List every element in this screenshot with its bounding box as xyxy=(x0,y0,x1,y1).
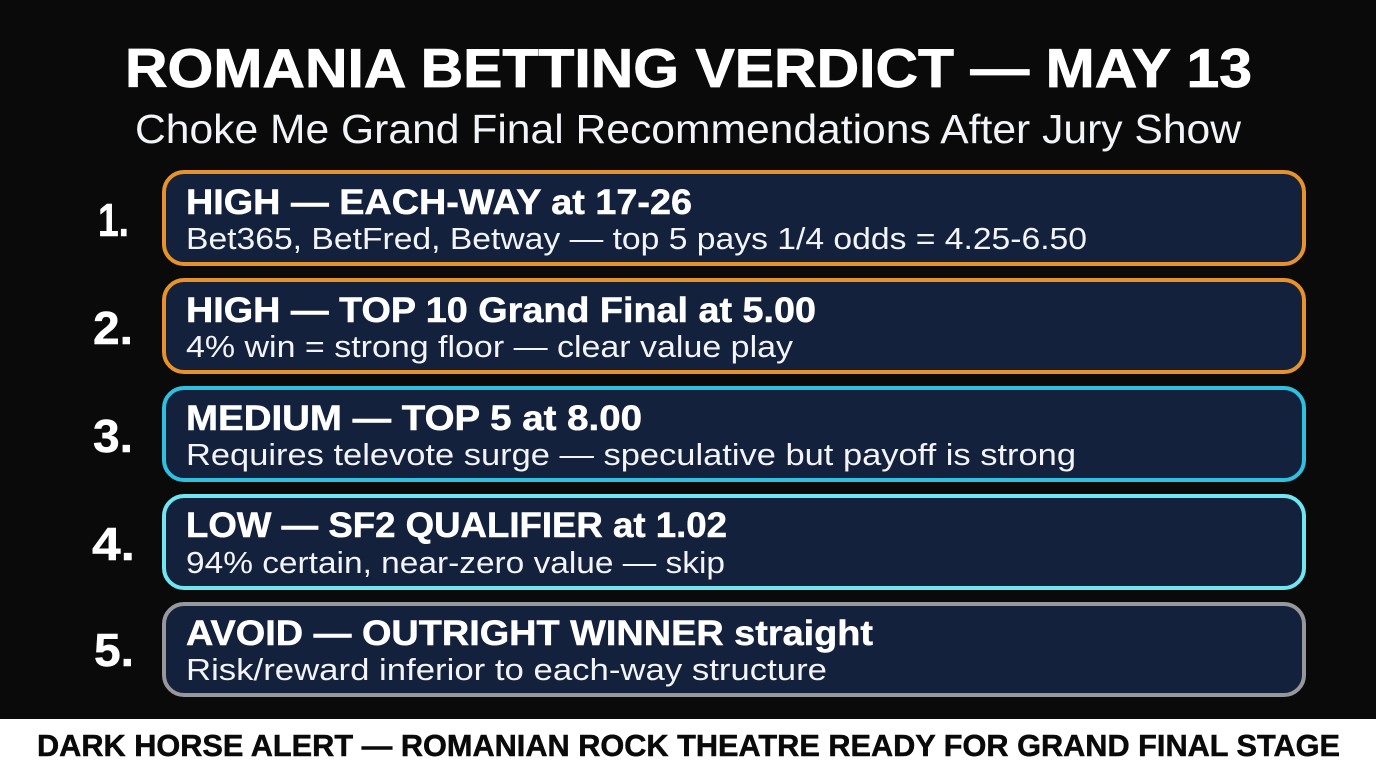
title: ROMANIA BETTING VERDICT — MAY 13 xyxy=(125,37,1252,99)
footer text: DARK HORSE ALERT — ROMANIAN ROCK THEATRE READY FOR GRAND FINAL STAGE xyxy=(37,728,1340,763)
card 1 xyxy=(164,172,1304,264)
card 2 xyxy=(164,280,1304,372)
card 4 xyxy=(164,496,1304,588)
card 5 xyxy=(164,604,1304,695)
detail 3: Requires televote surge — speculative but payoff is strong xyxy=(186,437,1076,472)
card 3 xyxy=(164,388,1304,480)
heading 3: MEDIUM — TOP 5 at 8.00 xyxy=(186,399,642,438)
footer banner xyxy=(0,719,1376,768)
number 5: 5. xyxy=(94,624,134,676)
number 4: 4. xyxy=(92,518,135,570)
detail 4: 94% certain, near-zero value — skip xyxy=(186,545,725,580)
number 2: 2. xyxy=(93,302,133,354)
panel: recommendation 5 xyxy=(94,604,1304,695)
number 3: 3. xyxy=(93,410,133,462)
detail 1: Bet365, BetFred, Betway — top 5 pays 1/4 odds = 4.25-6.50 xyxy=(186,221,1087,256)
detail 2: 4% win = strong floor — clear value play xyxy=(186,329,794,364)
panel: recommendation 2 xyxy=(93,280,1304,372)
panel: recommendation 3 xyxy=(93,388,1304,480)
heading 5: AVOID — OUTRIGHT WINNER straight xyxy=(186,614,873,653)
heading 1: HIGH — EACH-WAY at 17-26 xyxy=(186,183,692,222)
subtitle: Choke Me Grand Final Recommendations After Jury Show xyxy=(135,106,1241,152)
panel: recommendation 4 xyxy=(92,496,1304,588)
detail 5: Risk/reward inferior to each-way structure xyxy=(186,652,827,687)
heading 2: HIGH — TOP 10 Grand Final at 5.00 xyxy=(186,291,816,330)
number 1: 1. xyxy=(98,194,129,246)
panel: recommendation 1 xyxy=(98,172,1304,264)
heading 4: LOW — SF2 QUALIFIER at 1.02 xyxy=(186,506,727,545)
